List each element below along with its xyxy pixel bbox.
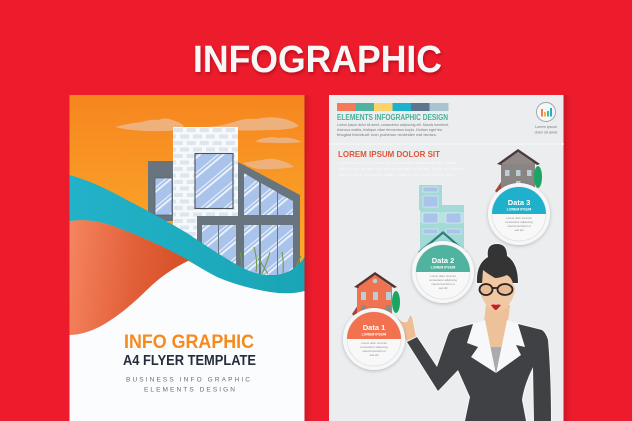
colour bar: [337, 103, 448, 111]
title: INFOGRAPHIC: [193, 39, 442, 81]
neck: [484, 305, 510, 348]
intro text: [337, 123, 449, 137]
icon caption: [534, 126, 558, 134]
white curve: [70, 261, 224, 335]
callout: data 2: [412, 241, 474, 303]
callout: data 3: sed elit: [515, 228, 524, 232]
section text: est neque posuere dolor mauris in nunc tortor leo.: [339, 172, 455, 177]
cover caption: BUSINESS INFO GRAPHIC: [126, 376, 250, 384]
brick tower: [173, 127, 238, 240]
callout: data 1: [343, 308, 405, 370]
callout: data 2: consectetur adipiscing: [429, 278, 457, 282]
panel: infographic page: [329, 95, 564, 421]
jacket: [407, 324, 551, 421]
callout: data 3: consectetur adipiscing: [505, 220, 533, 224]
callout: data 1: consectetur adipiscing: [360, 345, 388, 349]
callout: data 3: [488, 183, 550, 245]
hand: [397, 315, 416, 342]
callout: data 2: Data 2: [432, 256, 454, 265]
callout: data 2: sed elit: [439, 286, 448, 290]
cover heading: INFO GRAPHIC: [124, 331, 254, 353]
collar: [467, 320, 525, 373]
cover caption: [126, 377, 250, 392]
icon caption: Lorem ipsum: [535, 125, 557, 129]
icon: orange house: [352, 272, 400, 320]
icon: teal building: [418, 185, 467, 253]
icon: woman presenter: [397, 244, 551, 421]
coral wave: [70, 220, 190, 335]
teal wave: [70, 175, 304, 293]
section text: [339, 160, 465, 177]
callout: data 3: Data 3: [508, 198, 530, 207]
head: [480, 270, 515, 312]
cover caption: ELEMENTS DESIGN: [144, 386, 235, 394]
intro text: feugiat tincidunt non pulvinar molestie est lectus.: [337, 133, 437, 137]
right wing: [197, 162, 300, 280]
sky: [70, 95, 304, 275]
clouds: [115, 117, 302, 169]
callout: data 1: Data 1: [363, 323, 385, 332]
callout: data 1: Lorem dolor sit amet: [361, 341, 387, 345]
page heading: ELEMENTS INFOGRAPHIC DESIGN: [337, 113, 448, 122]
glasses: [480, 284, 512, 295]
callout: data 3: LOREM IPSUM: [507, 208, 531, 212]
panel: flyer cover: [70, 95, 304, 421]
section text: Lorem ipsum dolor sit amet, consectetur adipiscing elit. Mauris: [339, 160, 457, 165]
hair back: [477, 244, 518, 283]
intro text: rhoncus mattis, tristique vitae fermentum turpis. Nullam eget leo: [337, 128, 442, 132]
lips: [491, 304, 501, 310]
callout: data 2: Lorem dolor sit amet: [430, 274, 456, 278]
callout: data 3: Lorem dolor sit amet: [506, 216, 532, 220]
left wing: [148, 161, 173, 221]
blouse: [490, 347, 502, 372]
section text: sed elit nec ut nam lobortis ipsum eget requirent. Quam ac ullam in: [339, 166, 465, 171]
callout: data 1: LOREM IPSUM: [362, 332, 386, 336]
intro text: Lorem ipsum dolor sit amet, consectetur adipiscing elit. Mauris hendrerit,: [337, 123, 449, 127]
cover subheading: A4 FLYER TEMPLATE: [123, 352, 256, 369]
icon: bar chart badge: [536, 102, 556, 122]
callout: data 1: mauris hendrerit ut: [362, 349, 386, 353]
building: [148, 127, 301, 280]
section heading: LOREM IPSUM DOLOR SIT: [338, 150, 440, 159]
grass: [240, 247, 301, 274]
callout: data 1: sed elit: [370, 353, 379, 357]
callout: data 2: LOREM IPSUM: [431, 266, 455, 270]
callout: data 2: mauris hendrerit ut: [431, 282, 455, 286]
callout: data 3: mauris hendrerit ut: [507, 224, 531, 228]
icon caption: dolor sit amet: [535, 130, 558, 134]
icon: gray house: [495, 149, 542, 197]
